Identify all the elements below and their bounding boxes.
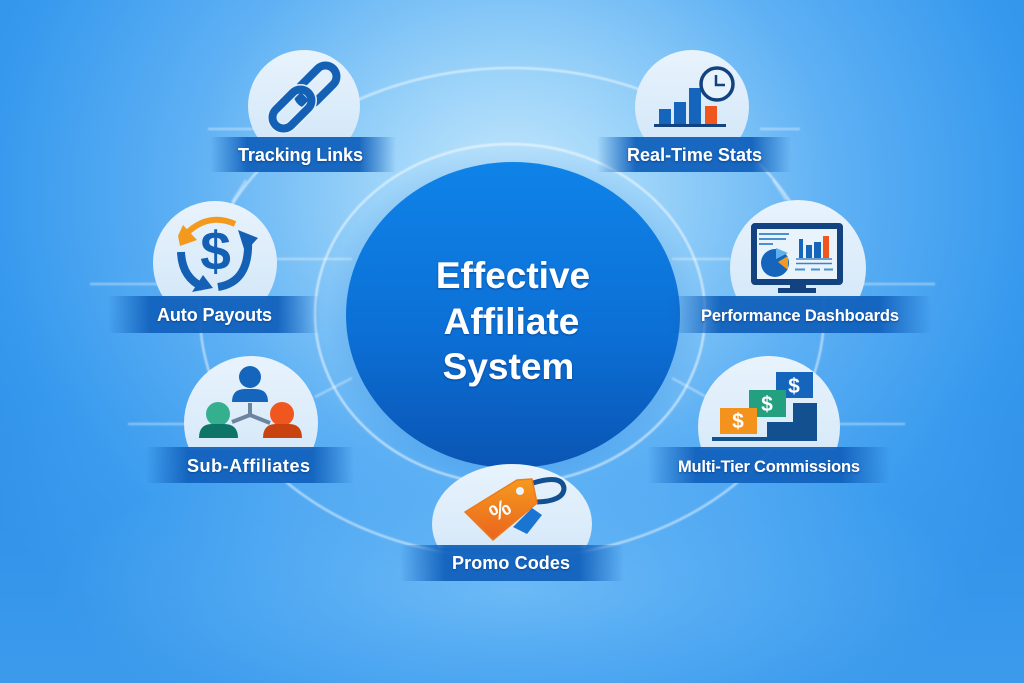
label band — [597, 137, 791, 172]
label: Multi-Tier Commissions — [678, 458, 860, 476]
title: System — [443, 346, 574, 387]
label band — [146, 447, 354, 483]
node: Real-Time Stats — [597, 50, 791, 172]
icon: tiered money steps: $ — [761, 393, 773, 416]
central circle — [326, 146, 698, 490]
node: Multi-Tier Commissions — [653, 356, 884, 483]
icon disc — [635, 50, 749, 137]
label band — [210, 137, 396, 172]
label band — [108, 296, 320, 333]
label: Promo Codes — [452, 553, 570, 573]
icon disc — [153, 201, 277, 296]
label band — [668, 296, 932, 333]
label band — [400, 545, 624, 581]
icon: bar chart with clock — [654, 68, 733, 127]
icon: price tag: % — [485, 494, 515, 526]
icon disc — [248, 50, 360, 137]
node: Performance Dashboards — [668, 200, 932, 336]
label: Sub-Affiliates — [187, 456, 310, 476]
label band — [648, 447, 890, 483]
label: Tracking Links — [238, 145, 363, 165]
icon disc — [698, 356, 840, 447]
icon disc — [432, 464, 592, 548]
node: Tracking Links — [210, 50, 396, 172]
icon: monitor dashboard — [754, 226, 840, 293]
icon: three people network — [199, 366, 302, 438]
icon: chain link — [268, 61, 341, 133]
orbit rings and connectors — [90, 68, 935, 558]
icon: tiered money steps: $ — [788, 375, 800, 398]
title: Affiliate — [444, 301, 579, 342]
icon: tiered money steps — [712, 372, 817, 441]
icon: dollar with circular arrows — [178, 220, 258, 292]
label: Real-Time Stats — [627, 145, 762, 165]
label: Auto Payouts — [157, 305, 272, 325]
icon: price tag — [465, 479, 564, 540]
icon disc — [184, 356, 318, 447]
icon: dollar with circular arrows: $ — [200, 220, 231, 282]
node: Sub-Affiliates — [146, 356, 354, 490]
icon disc — [730, 200, 866, 296]
icon: tiered money steps: $ — [732, 410, 744, 433]
node: Auto Payouts — [108, 201, 320, 333]
central glow — [326, 146, 698, 490]
central disc — [346, 162, 680, 468]
label: Performance Dashboards — [701, 307, 899, 325]
title: Effective — [436, 255, 590, 296]
node: Promo Codes — [400, 464, 624, 584]
